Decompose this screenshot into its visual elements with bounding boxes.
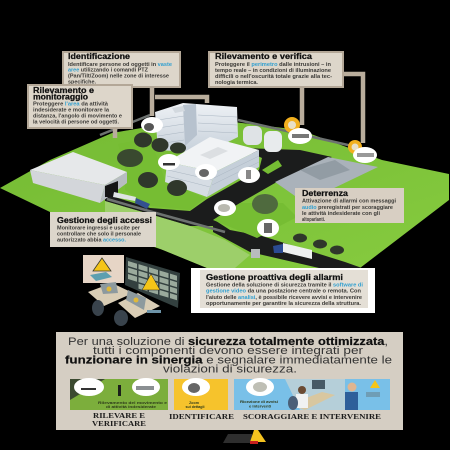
strip: scoraggiare e intervenire: Ricezione di avvisi xyxy=(240,400,278,404)
panel: rilevamento e verifica: Rilevamento e verifica xyxy=(215,52,313,61)
road network xyxy=(105,148,362,274)
panel: gestione degli accessi: controllare che solo il personale xyxy=(57,232,141,238)
panel: rilevamento e monitoraggio: Proteggere l'area da attività xyxy=(33,102,108,108)
front building xyxy=(165,137,259,197)
video wall xyxy=(125,257,180,308)
strip: rilevare e verificare xyxy=(70,378,168,410)
panel: gestione proattiva degli allarmi: Gestione della soluzione di sicurezza tramite il software di xyxy=(206,282,364,288)
step labels: RILEVARE E xyxy=(93,411,145,420)
step labels xyxy=(92,411,381,428)
panel: deterrenza: altoparlanti. xyxy=(302,217,325,223)
panel: rilevamento e monitoraggio: distanza, l'angolo di movimento e xyxy=(33,114,122,120)
panel: identificazione: Identificare persone od oggetti in vaste xyxy=(68,62,172,68)
light strip below the fence xyxy=(105,201,250,268)
panel: identificazione xyxy=(63,52,180,87)
panel: identificazione: aree utilizzando i comandi PTZ xyxy=(68,68,149,74)
strip: rilevare e verificare: di attività indesiderate xyxy=(106,405,156,409)
panel: rilevamento e monitoraggio xyxy=(28,85,132,128)
panel: gestione degli accessi xyxy=(50,212,156,247)
trees xyxy=(117,132,344,254)
strip: identificare xyxy=(174,378,228,410)
step labels: IDENTIFICARE xyxy=(169,412,234,421)
panel: rilevamento e verifica: difficili o nell'oscurità totale grazie alla tec- xyxy=(215,74,332,80)
headline: violazioni di sicurezza. xyxy=(163,364,297,376)
strip: rilevare e verificare: Rilevamento del movimento e xyxy=(98,401,167,405)
panel: gestione proattiva degli allarmi: l'aiuto delle analisi, è possibile ricevere avvisi e intervenire xyxy=(206,295,362,301)
control room illustration xyxy=(83,255,180,326)
desks and operators xyxy=(88,282,161,326)
strip: identificare: Zoom xyxy=(189,401,199,405)
panel: rilevamento e verifica: tempo reale – in condizioni di illuminazione xyxy=(215,68,331,74)
panel: rilevamento e monitoraggio: Rilevamento e xyxy=(33,86,95,95)
step labels: SCORAGGIARE E INTERVENIRE xyxy=(243,412,381,421)
panel: gestione proattiva degli allarmi: opportunamente per garantire la sicurezza della struttura. xyxy=(206,301,362,307)
panel: gestione proattiva degli allarmi: gestione video da una postazione centrale o remota. Con xyxy=(206,288,361,294)
panel: deterrenza: Deterrenza xyxy=(302,189,349,198)
panel: gestione proattiva degli allarmi xyxy=(191,268,375,313)
connector lines xyxy=(115,74,363,143)
headline: Per una soluzione di sicurezza totalmente ottimizzata , xyxy=(68,336,388,348)
substation pad xyxy=(275,157,378,196)
storage tanks xyxy=(243,126,282,152)
panel: rilevamento e monitoraggio: monitoraggio xyxy=(33,92,88,102)
camera icons xyxy=(141,117,377,237)
panel: rilevamento e verifica xyxy=(209,52,343,87)
panel: gestione degli accessi: Gestione degli accessi xyxy=(57,216,152,225)
warehouse xyxy=(30,152,127,203)
panel: deterrenza: audio preregistrati per scoraggiare xyxy=(302,205,393,211)
site illustration xyxy=(0,103,449,274)
panel: deterrenza: Attivazione di allarmi con messaggi xyxy=(302,198,397,204)
headline: funzionare in sinergia e segnalare immediatamente le xyxy=(65,354,392,366)
panel: rilevamento e monitoraggio: la velocità di persone od oggetti. xyxy=(33,120,120,126)
perimeter fence xyxy=(100,115,370,232)
panel: identificazione: specifiche. xyxy=(68,80,97,86)
logo xyxy=(223,430,266,444)
lawn xyxy=(0,118,449,268)
back building xyxy=(155,103,238,153)
strip: scoraggiare e intervenire: e interventi xyxy=(249,404,271,408)
thermal camera markers xyxy=(284,117,362,154)
panel: deterrenza xyxy=(295,188,404,223)
trucks xyxy=(113,192,312,259)
headline: tutti i componenti devono essere integrati per xyxy=(93,345,363,357)
step labels: VERIFICARE xyxy=(92,419,146,428)
panel: gestione degli accessi: Monitorare ingressi e uscite per xyxy=(57,226,140,232)
panel: gestione degli accessi: autorizzato abbia accesso. xyxy=(57,238,127,244)
panel: rilevamento e verifica: Proteggere il perimetro dalle intrusioni – in xyxy=(215,62,331,68)
panel: integration summary xyxy=(56,332,403,430)
phone alert card xyxy=(83,255,124,283)
panel: deterrenza: le attività indesiderate con gli xyxy=(302,211,381,217)
panel: rilevamento e verifica: nologia termica. xyxy=(215,80,259,86)
panel: identificazione: Identificazione xyxy=(68,52,131,61)
panel: rilevamento e monitoraggio: indesiderate e monitorare la xyxy=(33,108,109,114)
panel: gestione proattiva degli allarmi: Gestione proattiva degli allarmi xyxy=(206,273,343,282)
panel: identificazione: (Pan/Tilt/Zoom) nelle zone di interesse xyxy=(68,74,169,80)
central lawn patches xyxy=(118,138,297,238)
headline xyxy=(65,336,392,376)
strip: identificare: sui dettagli xyxy=(186,405,204,409)
strip: scoraggiare e intervenire xyxy=(234,378,390,410)
